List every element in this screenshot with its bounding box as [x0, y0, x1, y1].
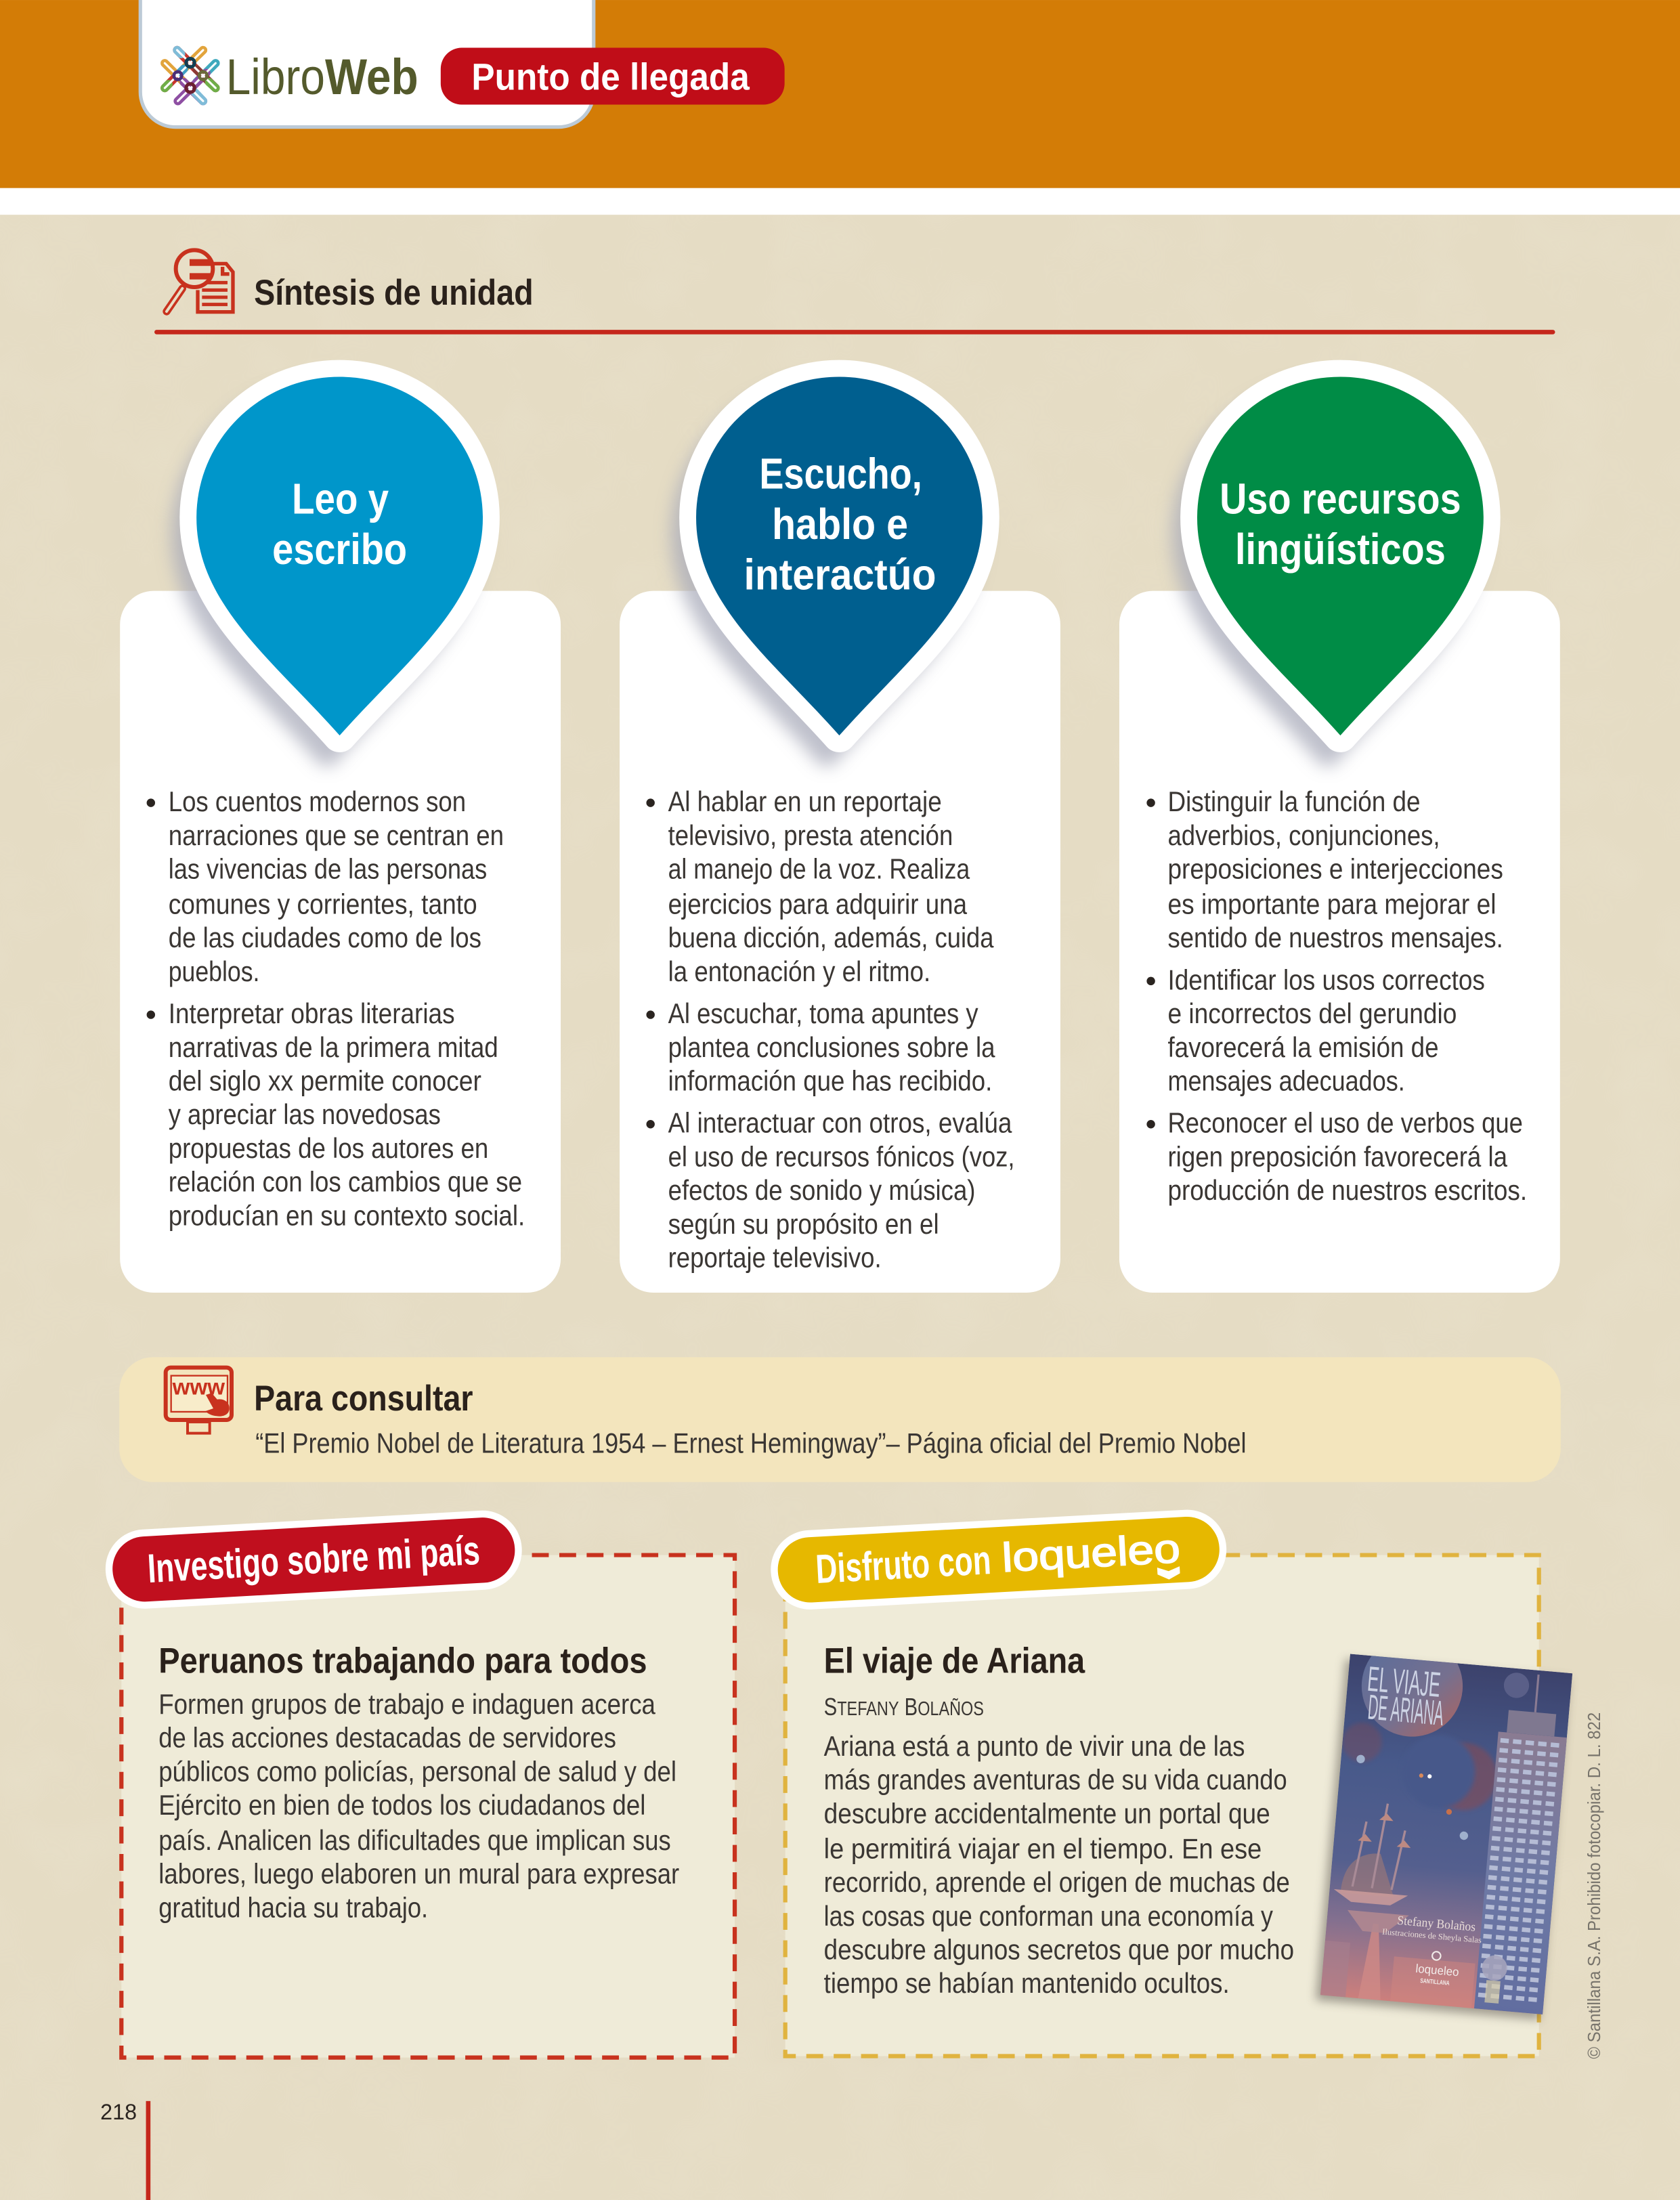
bullet list: es importante para mejorar el	[1167, 888, 1496, 920]
tag: Disfruto con loqueleo: Disfruto con	[815, 1537, 992, 1592]
bullet list: pueblos.	[169, 955, 259, 987]
book cover: El viaje de Ariana: DE ARIANA	[1366, 1687, 1446, 1733]
pin heading: Leo y	[292, 475, 389, 523]
bullet list: Interpretar obras literarias	[169, 997, 455, 1029]
tag: Investigo sobre mi país	[111, 1516, 517, 1603]
icon: magnifier over document	[167, 250, 233, 312]
panel: Investigo sobre mi país: de las acciones destacadas de servidores	[158, 1722, 616, 1754]
panel: Leo y escribo	[120, 377, 561, 1293]
pin heading	[272, 475, 407, 574]
bullet list: Distinguir la función de	[1167, 785, 1421, 817]
section heading: Síntesis de unidad	[167, 250, 534, 313]
bullet list: buena dicción, además, cuida	[668, 922, 994, 953]
bullet list: preposiciones e interjecciones	[1167, 853, 1503, 885]
bullet list: Los cuentos modernos son	[169, 785, 466, 817]
panel: Disfruto con loqueleo: le permitirá viajar en el tiempo. En ese	[824, 1832, 1262, 1864]
icon: www monitor: www	[172, 1375, 225, 1400]
panel: Investigo sobre mi país: gratitud hacia su trabajo.	[158, 1891, 428, 1923]
bullet list: y apreciar las novedosas	[169, 1098, 441, 1130]
bullet list: adverbios, conjunciones,	[1167, 819, 1440, 851]
pin shadow	[184, 393, 470, 754]
bullet list: según su propósito en el	[668, 1208, 939, 1240]
panel: Disfruto con loqueleo: STEFANY BOLAÑOS	[824, 1693, 984, 1721]
panel: Disfruto con loqueleo: Ariana está a punto de vivir una de las	[824, 1730, 1245, 1762]
bullet list	[646, 785, 1015, 1274]
panel: Investigo sobre mi país: Formen grupos de trabajo e indaguen acerca	[158, 1688, 656, 1720]
LibroWeb tab	[140, 0, 594, 127]
bullet list: producción de nuestros escritos.	[1167, 1174, 1527, 1206]
panel: Escucho, hablo e interactúo	[620, 377, 1060, 1293]
bullet list: mensajes adecuados.	[1167, 1065, 1405, 1097]
bullet list: producían en su contexto social.	[169, 1199, 525, 1231]
bullet list: rigen preposición favorecerá la	[1167, 1140, 1508, 1172]
icon: www monitor	[166, 1368, 232, 1433]
pin heading	[744, 449, 936, 599]
bullet list: Al hablar en un reportaje	[668, 785, 942, 817]
book cover: El viaje de Ariana: SANTILLANA	[1420, 1977, 1450, 1987]
top orange header band	[0, 0, 1680, 215]
panel: Investigo sobre mi país: públicos como policías, personal de salud y del	[158, 1755, 676, 1787]
pin: green	[1197, 377, 1484, 735]
panel: Disfruto con loqueleo: descubre accidentalmente un portal que	[824, 1797, 1270, 1829]
pin shadow	[683, 393, 970, 754]
tag: Disfruto con loqueleo: loqueleo	[1001, 1526, 1181, 1580]
copyright vertical note: © Santillana S.A. Prohibido fotocopiar. D. L. 822	[1585, 1712, 1604, 2059]
pin: blue	[196, 377, 483, 735]
bullet list: del siglo xx permite conocer	[169, 1065, 481, 1097]
panel: Disfruto con loqueleo: descubre algunos secretos que por mucho	[824, 1933, 1294, 1965]
bullet list: ejercicios para adquirir una	[668, 888, 968, 920]
panel: Disfruto con loqueleo	[776, 1515, 1574, 2056]
label pill: Punto de llegada: Punto de llegada	[471, 56, 750, 98]
page number: 218	[100, 2100, 137, 2124]
book cover: El viaje de Ariana: Stefany Bolaños	[1397, 1914, 1476, 1935]
panel: Para consultar: “El Premio Nobel de Literatura 1954 – Ernest Hemingway”– Página oficial del Premio Nobel	[255, 1427, 1247, 1459]
panel: Disfruto con loqueleo: tiempo se habían mantenido ocultos.	[824, 1967, 1230, 1999]
bullet list: televisivo, presta atención	[668, 819, 953, 851]
bullet list: Reconocer el uso de verbos que	[1167, 1107, 1523, 1139]
bullet list: información que has recibido.	[668, 1065, 992, 1097]
card body	[120, 591, 561, 1293]
panel: Para consultar: Para consultar	[254, 1379, 473, 1419]
bullet list: Identificar los usos correctos	[1167, 964, 1485, 995]
bullet list: relación con los cambios que se	[169, 1166, 522, 1198]
panel: Investigo sobre mi país	[111, 1516, 735, 2058]
panel: Disfruto con loqueleo: El viaje de Ariana	[824, 1641, 1085, 1681]
section heading: Síntesis de unidad: Síntesis de unidad	[254, 273, 534, 313]
pin heading: lingüísticos	[1235, 525, 1446, 574]
bullet list: efectos de sonido y música)	[668, 1174, 976, 1206]
bullet list: sentido de nuestros mensajes.	[1167, 922, 1503, 953]
bullet list: las vivencias de las personas	[169, 853, 487, 885]
panel: Investigo sobre mi país: Peruanos trabajando para todos	[158, 1641, 647, 1681]
label pill: Punto de llegada	[441, 48, 785, 104]
panel: Disfruto con loqueleo: las cosas que conforman una economía y	[824, 1900, 1273, 1932]
panel: Disfruto con loqueleo: más grandes aventuras de su vida cuando	[824, 1764, 1287, 1796]
bullet list: plantea conclusiones sobre la	[668, 1031, 995, 1063]
book cover: El viaje de Ariana: loqueleo	[1415, 1962, 1460, 1979]
tag: Investigo sobre mi país: Investigo sobre mi país	[146, 1528, 481, 1591]
divider rule	[154, 330, 1555, 335]
bullet list: el uso de recursos fónicos (voz,	[668, 1140, 1015, 1172]
pin shadow	[1184, 393, 1471, 754]
card body	[1119, 591, 1560, 1293]
bullet list: narraciones que se centran en	[169, 819, 504, 851]
icon: LibroWeb woven logo	[165, 50, 215, 101]
panel: Para consultar	[119, 1357, 1561, 1482]
bullet list	[147, 785, 525, 1231]
tag: Disfruto con loqueleo	[776, 1515, 1221, 1604]
bullet list: reportaje televisivo.	[668, 1242, 882, 1274]
bullet list	[1146, 785, 1527, 1206]
dashed box	[121, 1555, 735, 2058]
card body	[620, 591, 1060, 1293]
page number	[100, 2100, 150, 2200]
pin heading: interactúo	[744, 551, 936, 599]
bullet list: Al escuchar, toma apuntes y	[668, 997, 978, 1029]
panel: Investigo sobre mi país: país. Analicen las dificultades que implican sus	[158, 1824, 671, 1856]
bullet list: narrativas de la primera mitad	[169, 1031, 498, 1063]
pin: dark blue	[696, 377, 983, 735]
book cover: El viaje de Ariana: EL VIAJE	[1366, 1659, 1442, 1704]
book cover: El viaje de Ariana: Ilustraciones de Sheyla Salas	[1382, 1927, 1482, 1945]
bullet list: favorecerá la emisión de	[1167, 1031, 1438, 1063]
panel: Uso recursos lingüísticos	[1119, 377, 1560, 1293]
pin heading: Escucho,	[759, 449, 922, 498]
panel: Disfruto con loqueleo: recorrido, aprende el origen de muchas de	[824, 1866, 1290, 1898]
logo wordmark: LibroWeb	[226, 48, 418, 105]
dashed box	[785, 1555, 1539, 2056]
bullet list: comunes y corrientes, tanto	[169, 888, 477, 920]
pin heading: escribo	[272, 525, 407, 574]
panel: Investigo sobre mi país: labores, luego elaboren un mural para expresar	[158, 1858, 679, 1890]
bullet list: la entonación y el ritmo.	[668, 955, 930, 987]
pin heading	[1220, 475, 1461, 574]
bullet list: Al interactuar con otros, evalúa	[668, 1107, 1012, 1139]
book cover: El viaje de Ariana	[1316, 1630, 1574, 2020]
bullet list: de las ciudades como de los	[169, 922, 481, 953]
pin heading: hablo e	[772, 500, 908, 548]
panel: Investigo sobre mi país: Ejército en bien de todos los ciudadanos del	[158, 1789, 645, 1821]
bullet list: al manejo de la voz. Realiza	[668, 853, 970, 885]
bullet list: propuestas de los autores en	[169, 1132, 488, 1164]
pin heading: Uso recursos	[1220, 475, 1461, 523]
bullet list: e incorrectos del gerundio	[1167, 997, 1457, 1029]
